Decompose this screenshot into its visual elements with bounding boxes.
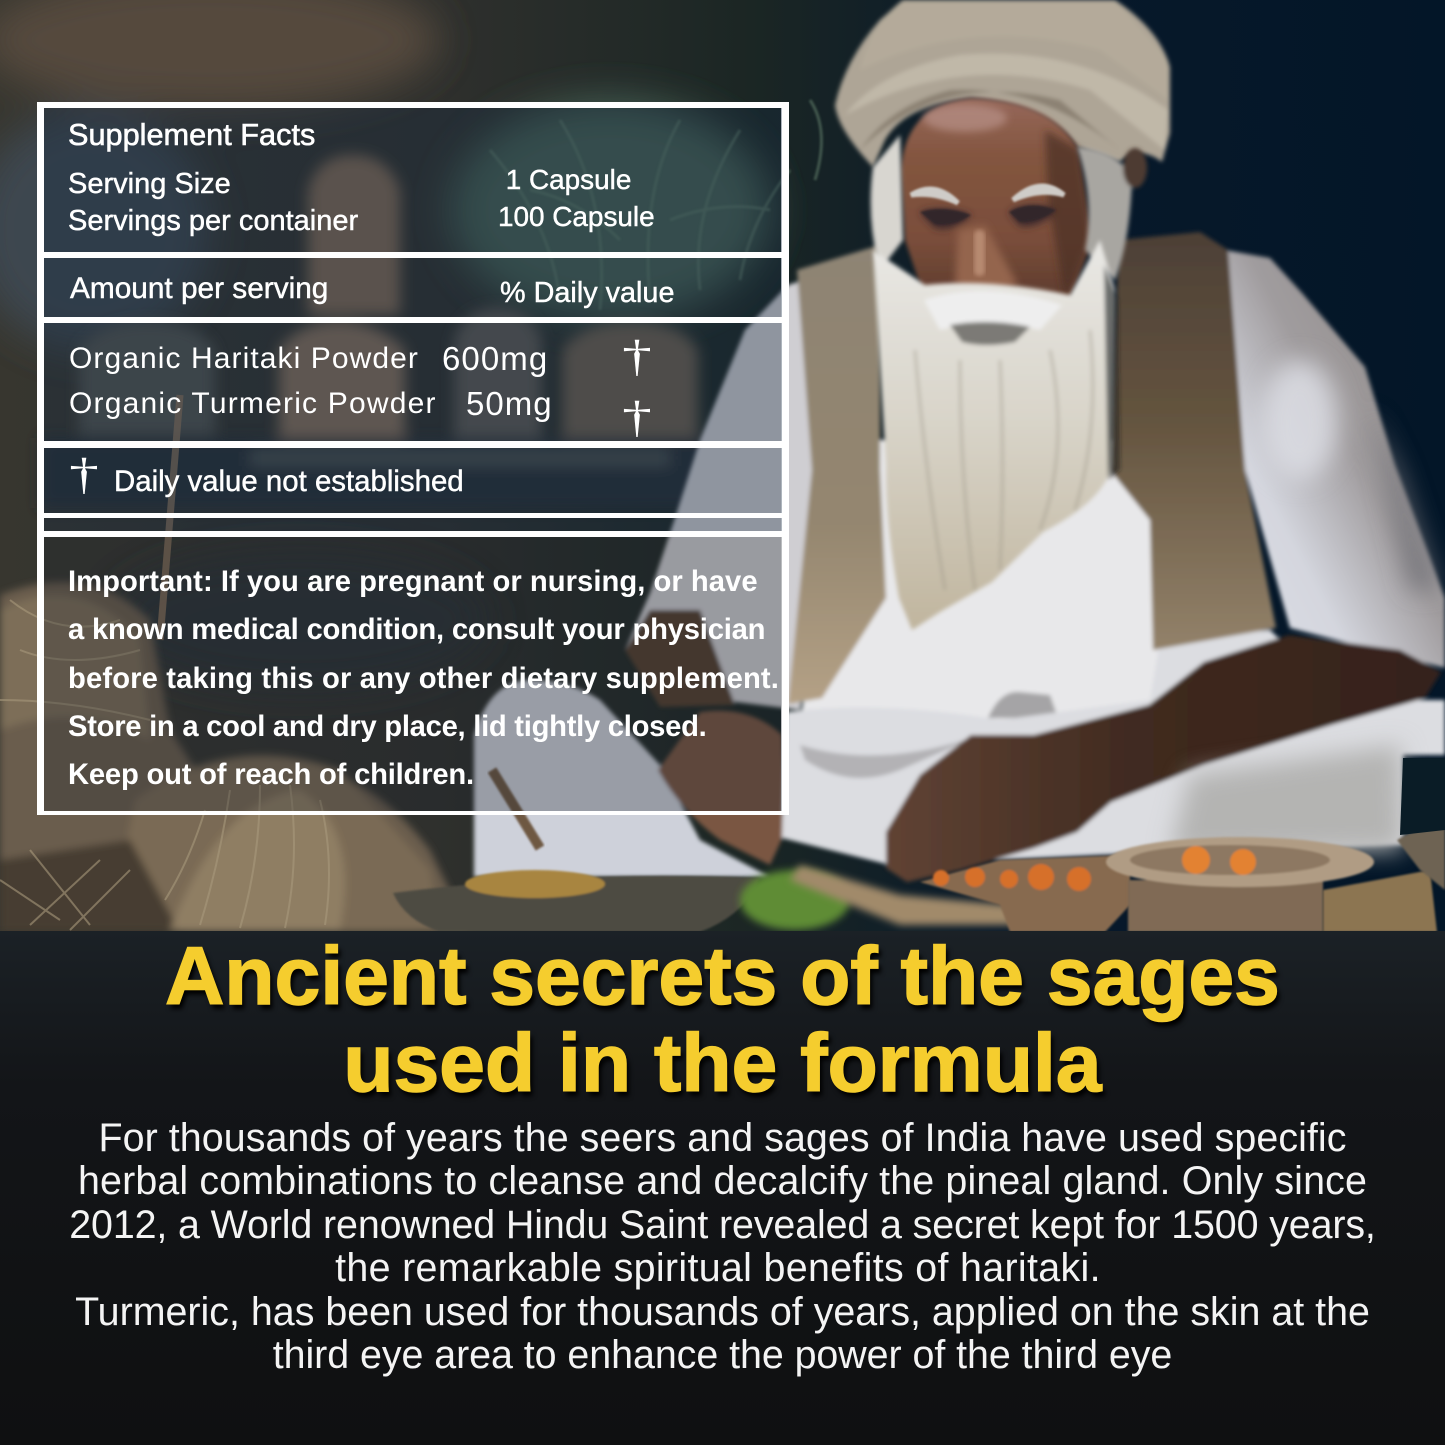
ingredient: turmeric: 50mg: [466, 385, 553, 422]
plant leaves: [490, 100, 821, 310]
main title: [165, 931, 1281, 1109]
post: [160, 395, 180, 640]
ingredient: haritaki: †: [622, 332, 652, 381]
serving values: [498, 164, 655, 232]
body paragraph: [69, 1116, 1376, 1377]
left hand: [658, 711, 786, 865]
background shelves, pots, plants: [0, 0, 770, 690]
body paragraph: For thousands of years the seers and sages of India have used specific: [99, 1116, 1346, 1160]
soft shading on shirt and sleeve: [1170, 360, 1440, 855]
serving values: 100 Capsule: [498, 201, 655, 232]
ingredient: haritaki: [69, 332, 652, 381]
amount label: Amount per serving: [70, 272, 328, 305]
right arm: [886, 635, 1441, 882]
ingredient: turmeric: †: [622, 393, 652, 442]
main title: Ancient secrets of the sages: [165, 931, 1280, 1022]
clay pot with fruit: [1106, 837, 1374, 932]
body paragraph: third eye area to enhance the power of the third eye: [273, 1333, 1172, 1377]
serving labels: Serving Size: [68, 168, 231, 200]
figure: [474, 0, 1445, 882]
right sleeve: [1225, 250, 1445, 668]
serving labels: Servings per container: [68, 205, 358, 237]
warning text: [68, 566, 779, 791]
footnote: Daily value not established: [114, 465, 464, 498]
torso: [800, 440, 1180, 820]
warning text: a known medical condition, consult your physician: [68, 614, 765, 646]
ingredient: turmeric: [69, 385, 652, 442]
serving values: 1 Capsule: [506, 164, 631, 195]
ingredient: haritaki: Organic Haritaki Powder: [69, 342, 419, 375]
main title: used in the formula: [343, 1018, 1102, 1109]
bottom dark panel: [0, 931, 1445, 1445]
burlap sacks: [0, 582, 470, 932]
body paragraph: herbal combinations to cleanse and decalcify the pineal gland. Only since: [78, 1159, 1367, 1203]
warning text: Important: If you are pregnant or nursing, or have: [68, 566, 758, 598]
left knee: [474, 680, 770, 877]
supplement facts panel: [37, 102, 789, 815]
burlap fibres and twigs: [0, 600, 329, 930]
daily value label: % Daily value: [500, 277, 674, 309]
footnote: [69, 450, 464, 499]
beard: [873, 240, 1120, 630]
stick: [492, 770, 540, 848]
tomato plate: [920, 855, 1130, 932]
turban: [835, 0, 1170, 167]
warning text: before taking this or any other dietary supplement.: [68, 663, 779, 695]
warning text: Store in a cool and dry place, lid tightly closed.: [68, 711, 706, 743]
body paragraph: Turmeric, has been used for thousands of years, applied on the skin at the: [75, 1290, 1370, 1334]
serving labels: [68, 168, 358, 237]
rope and sticks: [790, 865, 1020, 925]
bowl of grain: [393, 870, 760, 932]
green herbs: [740, 870, 850, 930]
sack and bowl right: [1323, 870, 1437, 932]
ingredient: haritaki: 600mg: [442, 340, 548, 377]
ingredient: turmeric: Organic Turmeric Powder: [69, 387, 437, 420]
warning text: Keep out of reach of children.: [68, 759, 474, 791]
face: [901, 98, 1092, 300]
vests: [788, 245, 886, 704]
body paragraph: 2012, a World renowned Hindu Saint revealed a secret kept for 1500 years,: [69, 1203, 1376, 1247]
body paragraph: the remarkable spiritual benefits of haritaki.: [335, 1246, 1101, 1290]
left shoulder and sleeve: [625, 275, 840, 710]
heading: supplement facts: Supplement Facts: [68, 117, 315, 152]
footnote: †: [69, 450, 99, 499]
background photo illustration: sage preparing herbs: [0, 0, 1445, 931]
lap: [782, 630, 1445, 865]
hair: [871, 135, 1147, 280]
